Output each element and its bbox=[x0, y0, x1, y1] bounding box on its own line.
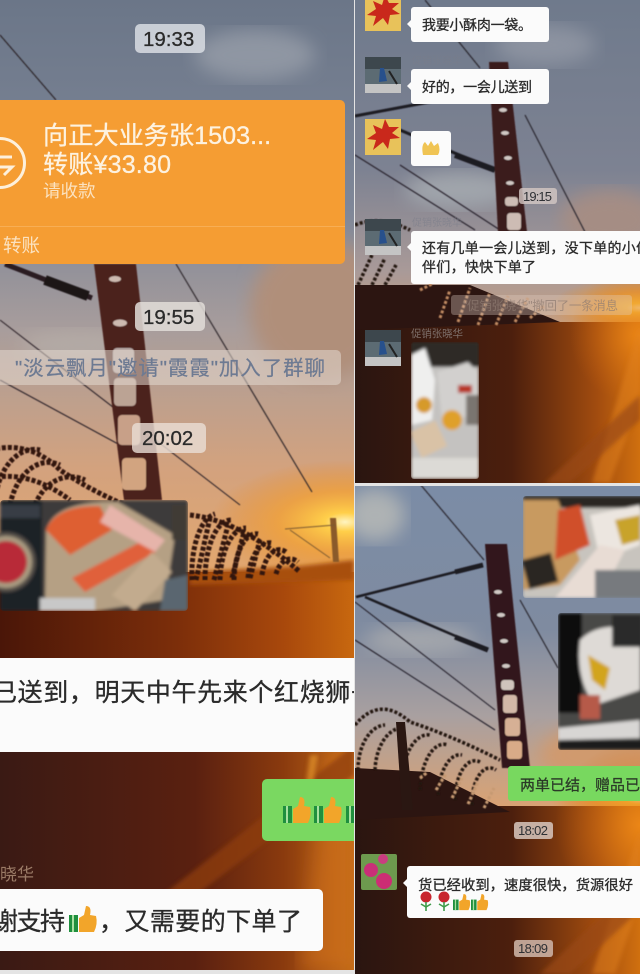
avatar: rider bbox=[365, 330, 401, 366]
time stamp 19:33: 19:33 bbox=[143, 28, 194, 51]
photo: food on counter bbox=[522, 496, 640, 598]
avatar: maple leaf bbox=[365, 0, 401, 31]
group join notice: "淡云飘月"邀请"霞霞"加入了群聊 bbox=[15, 357, 325, 380]
photo: delivery bags bbox=[410, 342, 479, 479]
sender name faint: 促销张晓华 bbox=[412, 54, 462, 67]
distant mast near the sun bbox=[285, 518, 339, 562]
chat bubble: reply: 好的，一会儿送到 bbox=[422, 79, 532, 95]
chat bubble: orders settled bbox=[508, 766, 640, 801]
time stamp 20:02: 20:02 bbox=[142, 427, 193, 450]
photo: bag in car bbox=[558, 613, 640, 750]
fence post bbox=[396, 722, 413, 810]
avatar: flowers bbox=[361, 854, 397, 890]
chat bubble: review: 货已经收到，速度很快，货源很好 bbox=[418, 877, 633, 894]
avatar: rider bbox=[365, 57, 401, 93]
transfer footer: 转账 bbox=[3, 235, 40, 256]
sender name faint: 促销张晓华 bbox=[412, 216, 462, 229]
time stamp 20:02 bbox=[132, 423, 206, 453]
time stamp 18:09: 18:09 bbox=[518, 941, 548, 956]
sender name: 春暖花开 bbox=[407, 867, 447, 880]
right top razor wire fence bbox=[355, 221, 545, 325]
recall notice bbox=[451, 295, 632, 315]
avatar: maple leaf bbox=[365, 119, 401, 155]
chat bubble: delivery message: 已送到，明天中午先来个红烧狮子 bbox=[0, 679, 376, 707]
time stamp 18:09 bbox=[514, 940, 553, 957]
time stamp 18:02 bbox=[514, 822, 553, 839]
time stamp 19:15: 19:15 bbox=[523, 189, 552, 204]
panel: right bottom chat screenshot bbox=[345, 484, 640, 974]
transfer recipient: 向正大业务张1503... bbox=[43, 122, 271, 150]
avatar: rider bbox=[365, 219, 401, 255]
left razor wire fence bbox=[0, 448, 300, 580]
sender name: 促销张晓华 bbox=[411, 327, 463, 340]
recall notice: "促销张晓华"撤回了一条消息 bbox=[463, 298, 618, 313]
chat bubble: delivery message bbox=[0, 658, 376, 752]
left power mast and wires bbox=[0, 35, 312, 505]
time stamp 19:33 bbox=[135, 24, 205, 53]
chat bubble: emoji bbox=[411, 131, 451, 166]
panel: right top chat screenshot bbox=[355, 0, 640, 483]
icon: transfer arrows bbox=[0, 138, 24, 188]
group join notice bbox=[0, 350, 341, 385]
chat bubble: thanks message: ，又需要的下单了 bbox=[99, 908, 302, 936]
right bottom power mast and wires bbox=[355, 484, 558, 768]
time stamp 18:02: 18:02 bbox=[518, 823, 548, 838]
chat bubble: reply bbox=[407, 69, 549, 104]
product photo bbox=[0, 500, 188, 611]
right top sunset background bbox=[355, 0, 640, 483]
chat bubble: reminder message: 伴们，快快下单了 bbox=[422, 259, 536, 275]
chat bubble: order message: 我要小酥肉一袋。 bbox=[422, 17, 532, 33]
left sunset background bbox=[0, 0, 354, 970]
panel: left chat screenshot bbox=[0, 0, 354, 970]
transfer prompt: 请收款 bbox=[43, 181, 96, 201]
chat bubble: thanks message bbox=[0, 889, 323, 951]
chat bubble: review bbox=[403, 866, 640, 918]
transfer card bbox=[0, 100, 345, 264]
right bottom razor wire fence bbox=[355, 709, 500, 808]
chat bubble: reminder message bbox=[407, 231, 640, 284]
time stamp 19:55: 19:55 bbox=[143, 306, 194, 329]
transfer amount: 转账¥33.80 bbox=[43, 151, 171, 179]
right bottom sunset background bbox=[345, 486, 640, 974]
right top power mast and wires bbox=[355, 0, 585, 232]
time stamp 19:55 bbox=[135, 302, 205, 331]
chat bubble: thumbs up bbox=[262, 779, 354, 841]
chat bubble: order message bbox=[407, 7, 549, 42]
